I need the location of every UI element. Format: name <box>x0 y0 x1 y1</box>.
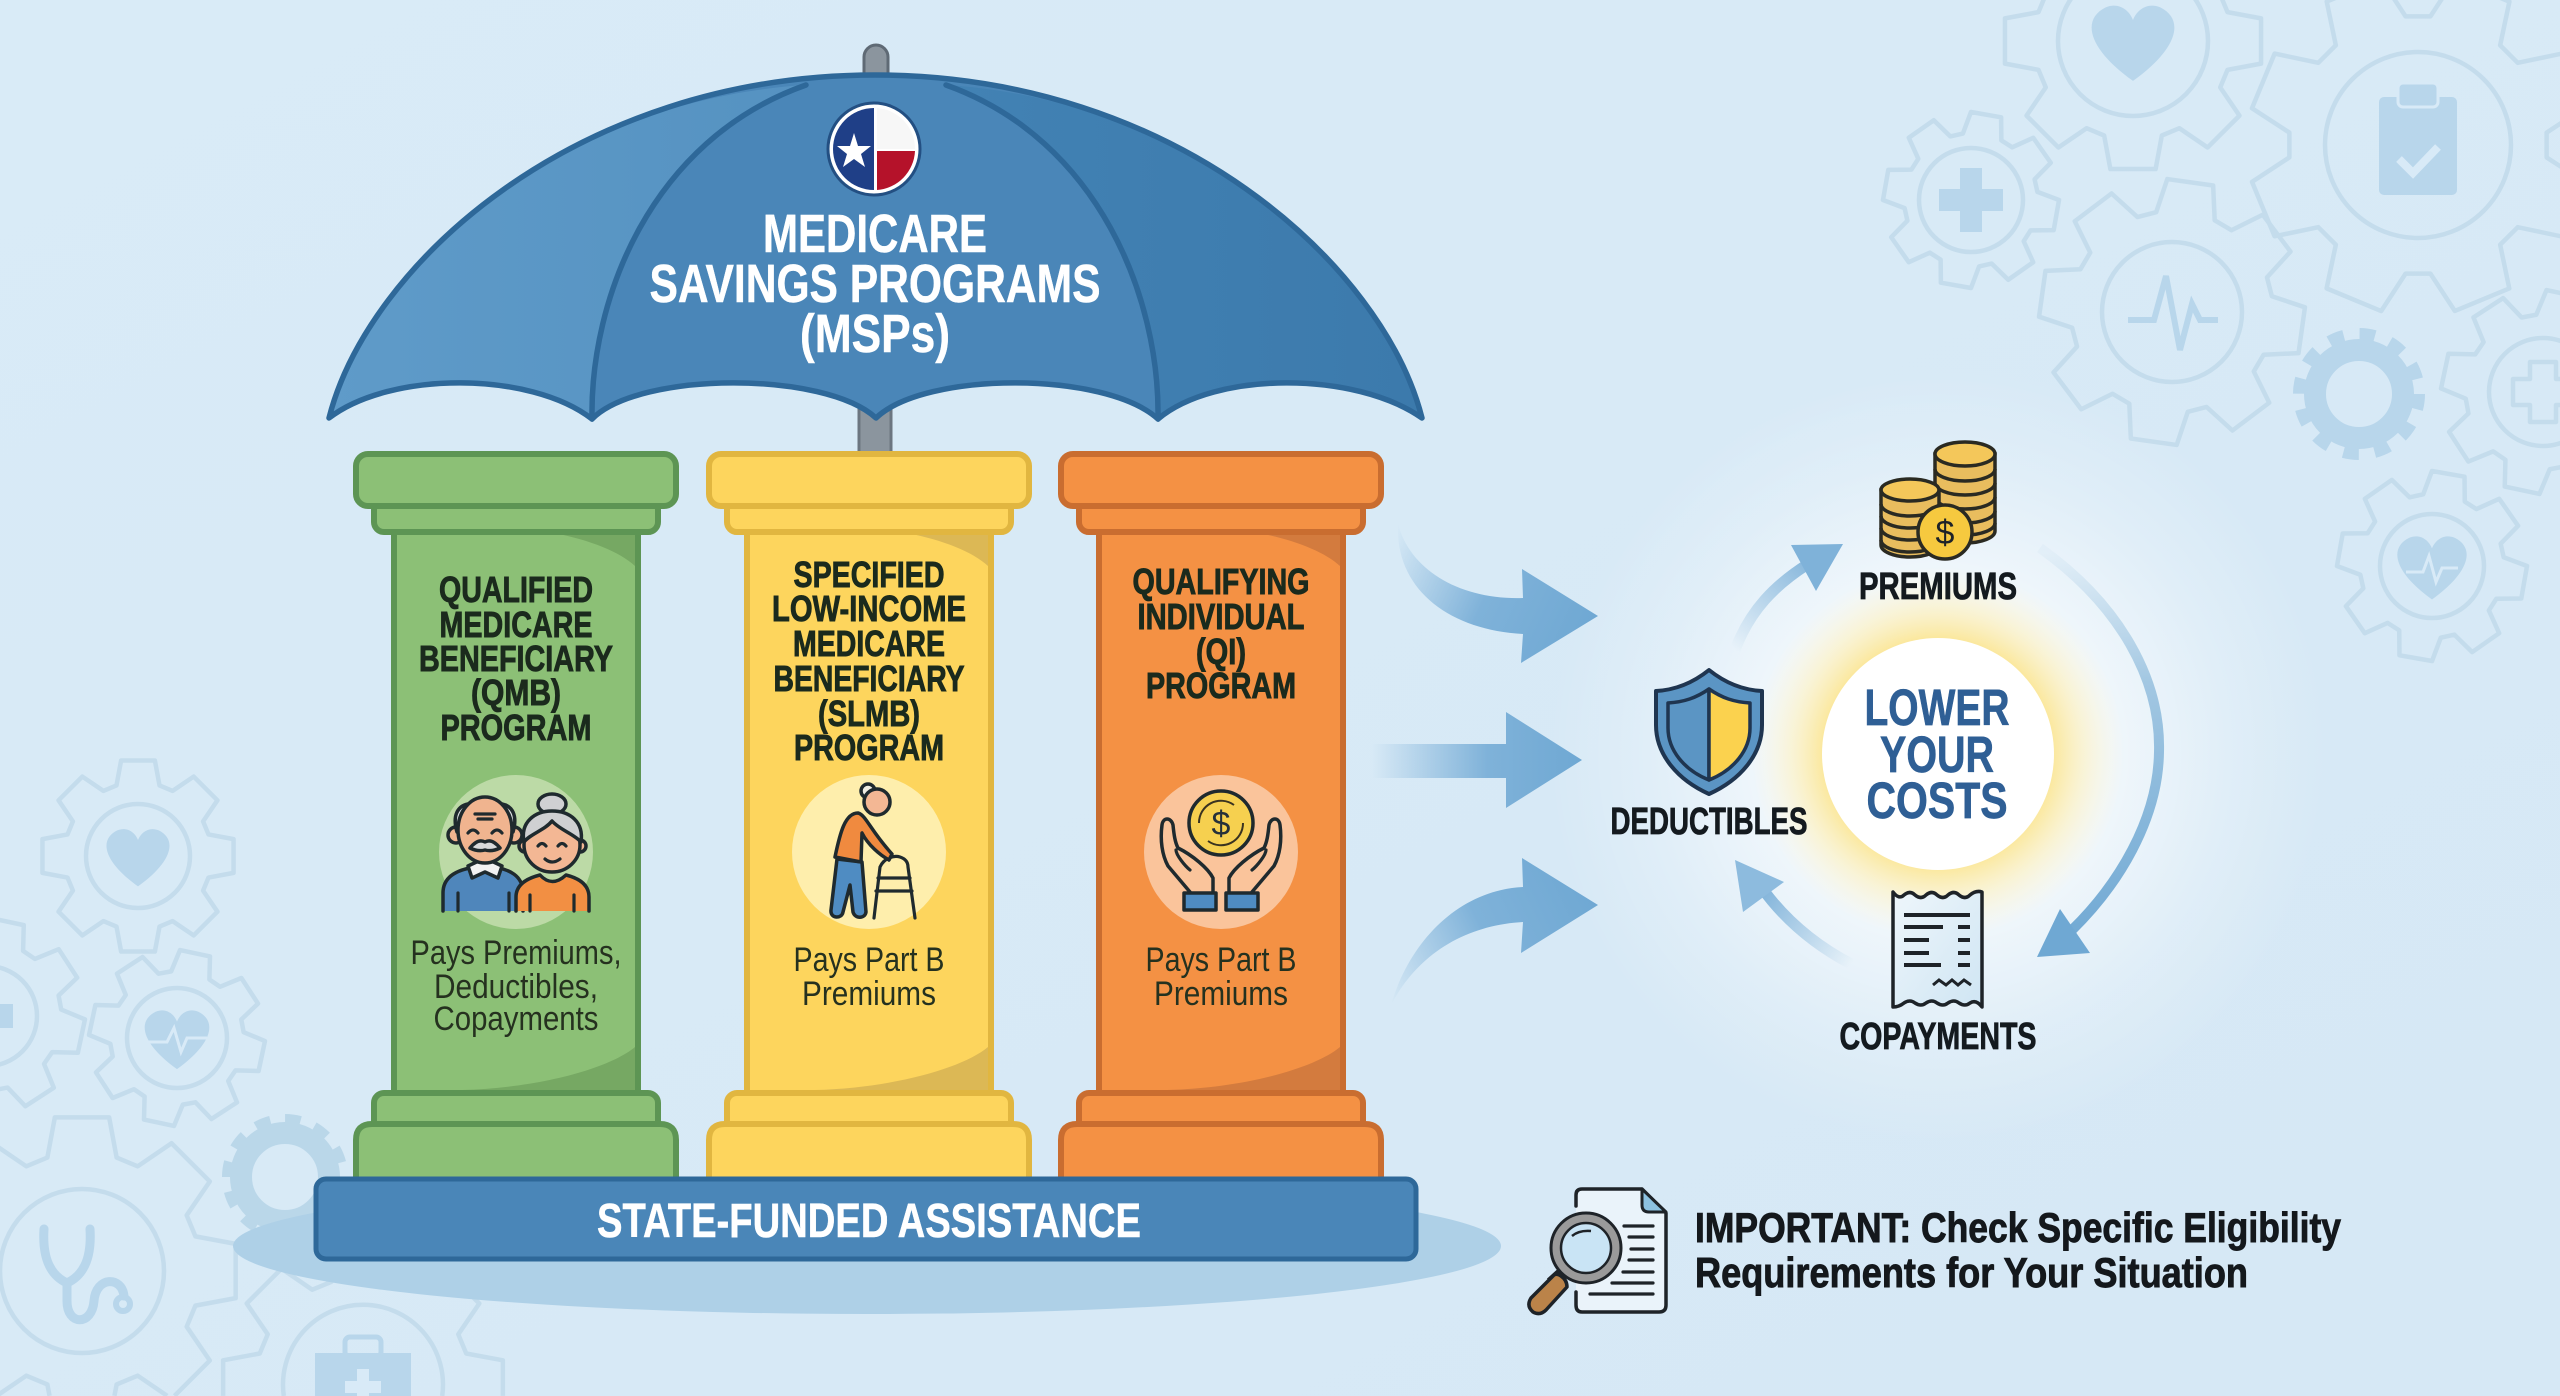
arrow: bottom program to costs <box>1391 858 1598 1005</box>
program name: LOW-INCOME <box>772 588 966 629</box>
program benefit <box>1146 941 1296 1013</box>
program name: BENEFICIARY <box>419 638 613 679</box>
title: SAVINGS PROGRAMS <box>650 254 1100 314</box>
program name <box>772 554 966 768</box>
program benefit: Premiums <box>1154 975 1288 1013</box>
gear: plus outline <box>2424 273 2560 511</box>
ground shadow <box>233 1178 1501 1314</box>
program benefit <box>794 941 944 1013</box>
background gears: bottom left <box>0 760 503 1396</box>
gear: plus <box>1871 100 2071 300</box>
platform: state-funded assistance <box>316 1179 1416 1259</box>
program name: (SLMB) <box>818 693 920 734</box>
pillar shaft <box>394 530 638 1093</box>
umbrella pole <box>859 400 891 456</box>
pillar cap <box>374 500 658 532</box>
pillar: SLMB (yellow) <box>709 454 1029 1180</box>
program name: INDIVIDUAL <box>1138 596 1304 637</box>
title: (MSPs) <box>800 304 950 364</box>
icon: document and magnifier <box>1529 1189 1666 1314</box>
program benefit: Pays Premiums, <box>410 934 622 972</box>
central callout: lower your costs <box>1752 567 2124 939</box>
arrow: top program to costs <box>1398 524 1598 663</box>
program benefit: Deductibles, <box>434 968 598 1006</box>
gear: heart pulse <box>2324 458 2540 674</box>
title <box>650 204 1100 364</box>
pillar cap <box>727 500 1011 532</box>
gear: medical kit <box>223 1245 503 1396</box>
label: copayments: COPAYMENTS <box>1840 1016 2036 1058</box>
icon: elderly couple <box>439 775 593 929</box>
program benefit: Pays Part B <box>1146 941 1296 979</box>
program name <box>419 569 613 748</box>
canopy outline <box>329 75 1422 419</box>
program name: BENEFICIARY <box>774 658 964 699</box>
pillar shaft <box>1099 530 1343 1093</box>
central callout: lower your costs: YOUR <box>1880 726 1994 783</box>
program name: QUALIFIED <box>439 569 593 610</box>
gear: stethoscope <box>0 1117 236 1396</box>
gear: plus cut off <box>0 902 101 1130</box>
program name: MEDICARE <box>793 623 945 664</box>
arrow: deductibles to premiums <box>1735 544 1843 650</box>
gear: heart <box>2005 0 2261 169</box>
arrow: copayments to deductibles <box>1735 860 1851 964</box>
icon: premiums coins <box>1881 442 1995 559</box>
arrow: premiums to copayments <box>2037 548 2159 957</box>
gear: clipboard <box>2199 0 2560 364</box>
woman <box>516 794 589 911</box>
icon: premiums coins: $ <box>1936 514 1955 552</box>
program name: PROGRAM <box>794 727 944 768</box>
platform: state-funded assistance: STATE-FUNDED ASSISTANCE <box>597 1195 1141 1248</box>
program name: MEDICARE <box>440 604 592 645</box>
umbrella tip <box>864 45 888 95</box>
pillar: QMB (green) <box>356 454 676 1180</box>
icon: Texas flag badge <box>828 103 920 195</box>
pillar cap <box>1079 500 1363 532</box>
umbrella <box>329 45 1422 456</box>
program name: PROGRAM <box>440 707 592 748</box>
gear: heart pulse left <box>74 935 280 1141</box>
gear: solid <box>2301 336 2417 452</box>
central callout: lower your costs: LOWER <box>1864 679 2010 736</box>
pillar base <box>727 1093 1011 1133</box>
important note: Requirements for Your Situation <box>1695 1249 2248 1296</box>
icon: person with walker <box>792 775 946 929</box>
glow behind savings cycle <box>1548 363 2328 1143</box>
program benefit: Premiums <box>802 975 936 1013</box>
man <box>443 797 523 911</box>
title: MEDICARE <box>763 204 987 264</box>
icon: hands holding coin <box>1144 775 1298 929</box>
program name: SPECIFIED <box>794 554 944 595</box>
icon: copayments receipt <box>1893 891 1982 1007</box>
program benefit: Pays Part B <box>794 941 944 979</box>
canopy left panel <box>329 85 806 419</box>
central callout: lower your costs: COSTS <box>1866 772 2008 829</box>
program name: (QI) <box>1196 631 1246 672</box>
program name: QUALIFYING <box>1132 561 1310 602</box>
umbrella canopy <box>329 75 1422 419</box>
pillar: QI (orange) <box>1061 454 1381 1180</box>
arrow: middle program to costs <box>1372 712 1582 808</box>
program benefit: Copayments <box>434 1000 598 1038</box>
gear: solid left <box>229 1121 341 1233</box>
pillar base <box>374 1093 658 1133</box>
label: premiums: PREMIUMS <box>1859 566 2017 608</box>
icon: hands holding coin: $ <box>1212 805 1231 843</box>
program name: PROGRAM <box>1146 665 1296 706</box>
pillar base <box>1079 1093 1363 1133</box>
icon: deductibles shield <box>1656 670 1762 794</box>
important note: IMPORTANT: Check Specific Eligibility <box>1695 1204 2342 1251</box>
umbrella ribs <box>592 85 1158 419</box>
label: deductibles: DEDUCTIBLES <box>1610 801 1808 843</box>
program name: (QMB) <box>471 672 561 713</box>
gear: pulse <box>2024 164 2320 460</box>
program name <box>1132 561 1310 706</box>
important note <box>1695 1204 2342 1296</box>
canopy right panel <box>946 85 1422 419</box>
program benefit <box>410 934 622 1038</box>
background gears: top right <box>1871 0 2560 674</box>
pillar shaft <box>747 530 991 1093</box>
gear: heart left <box>42 760 234 952</box>
